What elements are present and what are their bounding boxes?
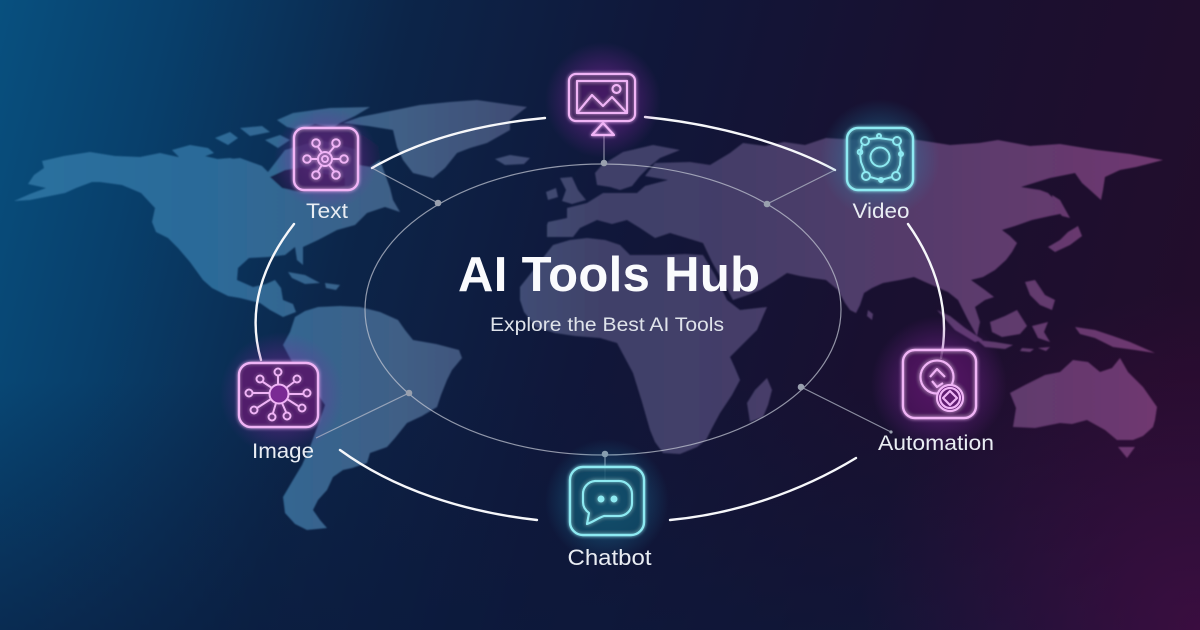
icon: Chatbot bubble [545,439,669,563]
icon: Text network [274,107,378,211]
icon: image monitor (top) [545,42,661,158]
New Guinea [1075,327,1155,353]
icon: Image network [220,332,344,456]
icon: Automation coins [871,316,1007,452]
Baffin Island [277,107,370,130]
British Isles [546,177,586,204]
connector nodes [406,160,893,457]
label: Automation: Automation [878,432,994,455]
outer white arcs [256,117,944,520]
Madagascar [747,378,772,422]
icon: Video orbit [820,99,940,219]
connector spokes [316,135,891,482]
Sulawesi [1032,322,1050,342]
label: Video: Video [852,200,910,223]
inner orbit ellipse [365,164,841,455]
Philippines and Taiwan [1025,280,1055,310]
Iceland [495,155,530,165]
North America [14,140,400,317]
label: Image: Image [252,440,314,463]
subtitle: Explore the Best AI Tools [490,315,724,336]
Arctic islands [172,126,290,168]
Japan [1048,195,1082,252]
Africa [520,238,767,454]
South America [283,306,462,530]
Hudson Bay [270,133,380,192]
label: Chatbot: Chatbot [568,545,652,570]
Eurasia [547,138,1163,336]
label: Text: Text [306,200,348,223]
Greenland [343,100,527,178]
Sri Lanka [867,310,873,320]
title: AI Tools Hub [458,248,760,302]
Sumatra and Java [937,310,1050,352]
Tasmania [1118,447,1135,458]
Borneo [990,310,1027,337]
world map [14,100,1163,530]
Australia [1010,358,1157,440]
Scandinavia [595,145,680,190]
Cuba and Caribbean [288,272,340,290]
